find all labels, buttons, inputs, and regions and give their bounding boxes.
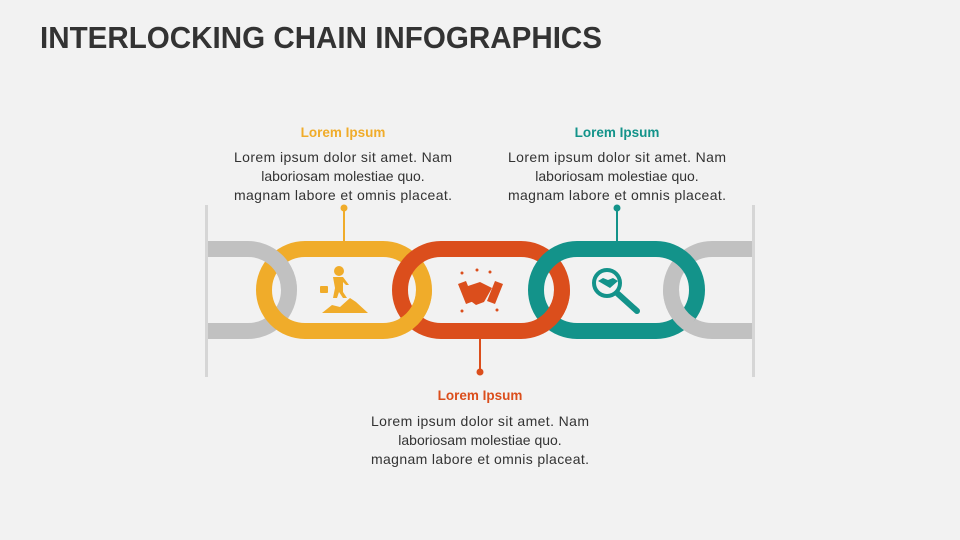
text block: yellow: magnam labore et omnis placeat. xyxy=(234,187,452,203)
text block: teal: laboriosam molestiae quo. xyxy=(535,168,699,184)
icon: climber xyxy=(320,266,368,313)
overlap: gray over yellow xyxy=(268,254,289,290)
text block: teal: Lorem Ipsum xyxy=(575,125,659,140)
text block: orange: Lorem Ipsum xyxy=(438,388,522,403)
text block: orange: Lorem ipsum dolor sit amet. Nam xyxy=(371,413,589,429)
connector orange xyxy=(476,339,484,376)
overlap: yellow over orange xyxy=(404,290,424,326)
icon: magnifier handshake xyxy=(594,270,637,311)
text block: teal: magnam labore et omnis placeat. xyxy=(508,187,726,203)
text block: orange: laboriosam molestiae quo. xyxy=(398,432,562,448)
text block: yellow xyxy=(234,125,452,203)
overlap: gray over teal xyxy=(671,290,692,326)
text block: yellow: laboriosam molestiae quo. xyxy=(261,168,425,184)
text block: teal xyxy=(508,125,726,203)
chain xyxy=(208,249,752,331)
link: gray left xyxy=(208,249,289,331)
link: orange xyxy=(400,249,562,331)
link: gray right xyxy=(671,249,752,331)
side bar right xyxy=(752,205,755,377)
text block: yellow: Lorem ipsum dolor sit amet. Nam xyxy=(234,149,452,165)
text block: yellow: Lorem Ipsum xyxy=(301,125,385,140)
connector teal xyxy=(614,204,620,241)
connector yellow xyxy=(340,204,348,241)
text block: orange: magnam labore et omnis placeat. xyxy=(371,451,589,467)
title: INTERLOCKING CHAIN INFOGRAPHICS xyxy=(40,20,602,55)
text block: orange xyxy=(371,388,589,467)
text block: teal: Lorem ipsum dolor sit amet. Nam xyxy=(508,149,726,165)
side bar left xyxy=(205,205,208,377)
link: teal xyxy=(536,249,697,331)
link: yellow xyxy=(264,249,424,331)
icon: handshake xyxy=(458,268,503,312)
overlap: orange over teal xyxy=(542,290,562,326)
